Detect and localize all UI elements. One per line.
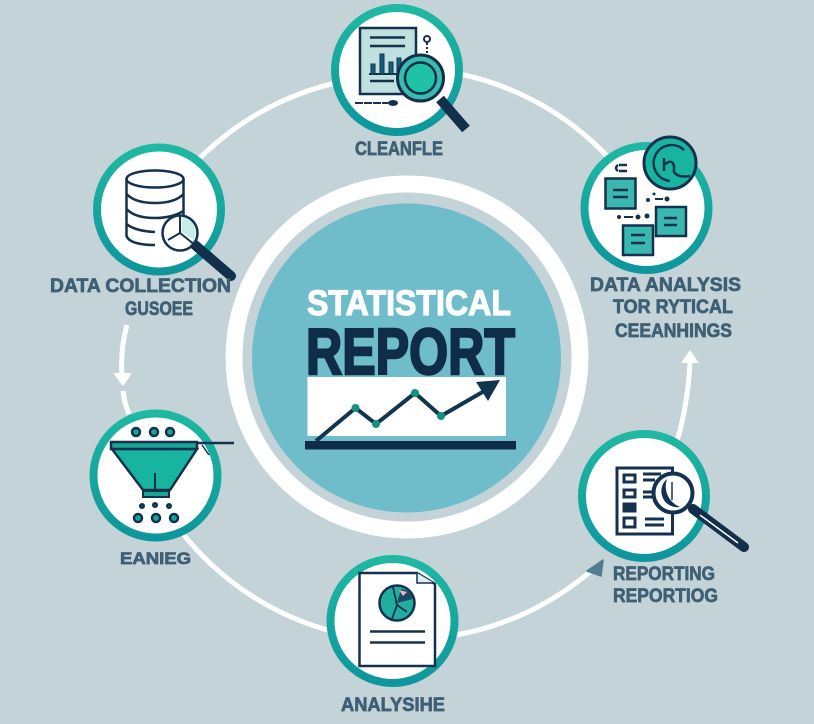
icon: checklist <box>617 468 672 534</box>
icon: database <box>126 170 184 245</box>
label: data collection: DATA COLLECTION <box>50 275 231 297</box>
icon: magnifier <box>398 55 466 129</box>
icon: pie chart <box>380 586 414 620</box>
label: analysihe: ANALYSIHE <box>341 694 445 716</box>
icon: analysis badge <box>644 137 696 189</box>
icon: data boxes <box>606 165 686 255</box>
icon: magnifier <box>162 216 231 276</box>
arrow: right upward <box>681 350 699 363</box>
label: data analysis: DATA ANALYSIS <box>590 274 741 296</box>
icon: magnifier <box>654 474 744 547</box>
arrow: lower right <box>587 560 603 576</box>
label: cleanfle: CLEANFLE <box>355 138 443 160</box>
icon: document <box>360 573 435 666</box>
label: tor rytical: TOR RYTICAL <box>613 296 733 318</box>
icon: document with chart <box>355 28 430 106</box>
label: ceeanhings: CEEANHINGS <box>615 320 732 342</box>
cycle ring arcs and arrows <box>122 73 690 636</box>
hub title: statistical: STATISTICAL <box>307 284 511 323</box>
label: gusoee: GUSOEE <box>125 298 193 320</box>
icon: connector dots <box>617 192 670 220</box>
node: lower right checklist <box>582 434 744 558</box>
node: bottom document <box>330 559 454 683</box>
label: reportiog: REPORTIOG <box>613 585 718 607</box>
node: lower left funnel <box>94 414 234 538</box>
arrow: left downward <box>113 373 132 386</box>
icon: droplets <box>132 428 178 522</box>
label: eanieg: EANIEG <box>120 549 191 568</box>
label: reporting: REPORTING <box>613 563 715 585</box>
node: right data analysis <box>584 137 708 270</box>
node: left database <box>97 148 231 276</box>
central hub <box>234 184 580 530</box>
hub line chart <box>305 377 516 450</box>
hub title: report: REPORT <box>306 315 515 388</box>
node: top report and magnifier <box>335 8 466 132</box>
icon: funnel <box>111 442 234 497</box>
